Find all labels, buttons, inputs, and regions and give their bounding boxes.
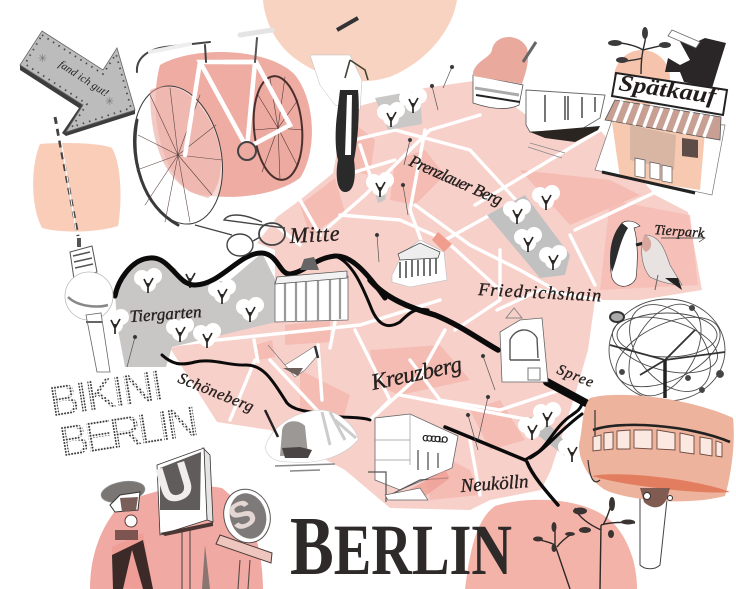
pins	[127, 65, 495, 450]
icon: Cocolo shop: COCOLO	[422, 433, 448, 445]
Spree label: Spree	[555, 362, 596, 391]
icon: arrow sign: ✳	[38, 52, 47, 65]
streets	[170, 115, 660, 495]
map base	[170, 80, 702, 510]
icon: seagull	[268, 345, 318, 377]
Bikini Berlin dotted lettering: BIKINI	[46, 360, 167, 427]
icon: legs	[310, 18, 368, 192]
Schöneberg label: Schöneberg	[176, 370, 256, 416]
Kreuzberg label: Kreuzberg	[368, 351, 464, 395]
U sign	[150, 448, 213, 536]
icon: bicycle	[121, 30, 306, 232]
district labels	[129, 151, 602, 497]
icon: museum building	[392, 240, 447, 287]
S sign: S	[222, 491, 263, 540]
icon: arrow sign: ✳	[105, 95, 114, 108]
Prenzlauer Berg label: Prenzlauer Berg	[405, 151, 505, 209]
Tiergarten park	[101, 253, 278, 367]
S sign	[216, 484, 276, 563]
icon: TV tower	[55, 117, 113, 372]
awning	[605, 100, 721, 140]
sign	[612, 73, 727, 115]
icon: plate of food	[265, 410, 358, 471]
small park north	[375, 88, 427, 130]
icon: U-Bahn and S-Bahn signs	[100, 448, 276, 589]
Tiergarten label: Tiergarten	[129, 302, 202, 326]
peach wash top	[263, 0, 457, 81]
icon: arrow sign: fand ich gut!	[56, 58, 111, 100]
darker city blocks	[255, 120, 698, 500]
small park south-east	[518, 402, 586, 462]
plant	[612, 32, 668, 74]
Spätkauf sign lettering: Spätkauf	[617, 70, 720, 109]
bear	[665, 38, 726, 88]
icon: arrow sign	[20, 31, 135, 136]
statue	[202, 545, 210, 589]
Mitte label: Mitte	[288, 220, 340, 248]
icon: tram	[526, 90, 605, 158]
icon: arched building	[500, 308, 548, 382]
small park left of Prenzlauer Berg	[366, 172, 394, 203]
Neukölln label: Neukölln	[459, 471, 529, 497]
icon: round tower restaurant	[579, 395, 734, 569]
salmon square	[432, 232, 452, 252]
park trees	[101, 263, 264, 348]
icon: Spätkauf kiosk	[595, 27, 727, 195]
icon: glasses	[195, 215, 285, 256]
icon: Brandenburg Gate	[275, 257, 348, 322]
Landwehr canal	[162, 355, 370, 420]
Friedrichshain label: Friedrichshain	[477, 279, 602, 305]
pink wash bottom left	[90, 486, 263, 589]
district map	[170, 80, 702, 510]
peach wash left	[33, 143, 120, 232]
icon: Cocolo shop	[368, 414, 458, 502]
icon: ice cream cup	[473, 37, 536, 109]
icon: penguin and pigeon	[610, 221, 682, 290]
pink wash bottom right	[465, 500, 637, 589]
Bikini Berlin dotted lettering: BERLIN	[56, 397, 202, 467]
pink wash behind bicycle	[155, 52, 312, 197]
U sign: U	[150, 450, 201, 516]
icon: world clock	[605, 289, 731, 408]
traffic light	[100, 478, 153, 589]
Tierpark label with arrow: Tierpark	[654, 223, 705, 242]
Bikini Berlin dotted lettering	[46, 360, 202, 467]
River Spree	[115, 253, 586, 505]
plants in pink wash	[533, 497, 635, 589]
park north-east with trees	[487, 185, 570, 278]
